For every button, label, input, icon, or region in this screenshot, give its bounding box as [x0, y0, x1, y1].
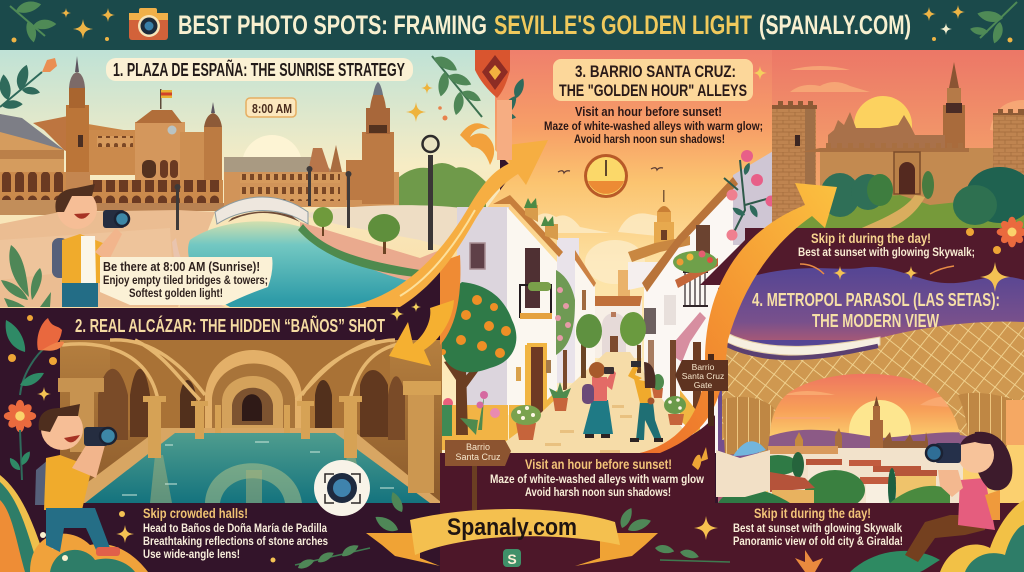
text block: sunset tips — [544, 104, 763, 146]
right tower — [362, 132, 394, 204]
illustration: far buildings and gate — [592, 270, 642, 358]
band: maroon upper — [700, 228, 1024, 285]
text block: lower sunset tips: Visit an hour before sunset! — [525, 456, 672, 472]
decoration: band stars — [833, 262, 1010, 292]
text block: skip by day bottom — [733, 505, 903, 548]
illustration: parasol columns — [722, 393, 1024, 455]
decoration: leaf sprig left — [0, 58, 57, 110]
text box: sunrise tips: Be there at 8:00 AM (Sunrise)! — [103, 259, 260, 274]
text block: lower sunset tips — [490, 456, 705, 499]
right wing — [224, 157, 335, 174]
decoration: band swirls — [800, 264, 954, 274]
text block: skip by day bottom: Best at sunset with glowing Skywalk — [733, 521, 902, 535]
illustration: side arches — [98, 369, 405, 440]
text block: sunset tips: Maze of white-washed alleys with warm glow; — [544, 119, 763, 133]
illustration: street trees — [555, 270, 706, 378]
illustration: clouds — [790, 66, 1024, 135]
person: woman with camera — [905, 432, 1012, 562]
band: purple heading — [718, 267, 1024, 345]
illustration: side walkways — [60, 428, 442, 503]
illustration: small trees — [313, 207, 400, 254]
arrow: Barrio to Metropol — [640, 183, 837, 453]
panel 4: Metropol Parasol band — [700, 217, 1024, 510]
heading: panel 4: THE MODERN VIEW — [812, 311, 939, 331]
illustration: reflecting pool — [85, 433, 430, 503]
text block: sunset tips: Avoid harsh noon sun shadows! — [574, 132, 725, 146]
text box: sunrise tips: Enjoy empty tiled bridges & towers; — [103, 273, 268, 287]
illustration: sun — [854, 96, 912, 154]
decoration: leaf accent — [692, 447, 708, 470]
text block: Baños tips: Skip crowded halls! — [143, 505, 248, 521]
banner: Spanaly.com — [366, 509, 658, 567]
illustration: castle walls — [772, 101, 1024, 243]
ribbon tails — [366, 533, 658, 566]
panel 3 lower: sunset text band — [440, 415, 715, 503]
panel 2: Real Alcázar — [0, 272, 442, 572]
text block: Baños tips: Head to Baños de Doña María de Padilla — [143, 521, 327, 535]
panel 4 top: Alcázar and cathedral at sunset — [772, 50, 1024, 250]
illustration: lamp posts — [174, 136, 438, 250]
decoration: left stars — [12, 8, 115, 42]
heading: panel 3 — [553, 59, 753, 101]
signpost: Barrio Santa Cruz Gate: Barrio — [692, 362, 715, 372]
illustration: glass dome — [716, 450, 770, 497]
illustration: vault ribs — [62, 340, 410, 400]
decoration: plant bottom left — [1, 245, 51, 307]
decoration: left floral column — [4, 315, 64, 480]
title: SEVILLE'S GOLDEN LIGHT — [494, 10, 752, 40]
person: photographer crouching — [35, 404, 120, 556]
illustration: city roofs — [718, 446, 963, 510]
person: tourist in teal skirt — [582, 362, 616, 438]
illustration: parasol lattice canopy — [722, 322, 1024, 445]
illustration: nested arches — [205, 350, 302, 430]
text block: skip by day top — [798, 230, 975, 259]
badge: 8:00 AM: 8:00 AM — [252, 101, 292, 116]
text block: Baños tips: Breathtaking reflections of stone arches — [143, 534, 328, 548]
illustration: sun — [242, 135, 302, 195]
illustration: flower pots — [511, 374, 686, 440]
text block: skip by day top: Skip it during the day! — [811, 230, 931, 246]
decoration: stars — [406, 82, 448, 122]
text block: Baños tips — [143, 505, 328, 561]
illustration: Parasol view — [716, 322, 1024, 510]
illustration: skywalk railing — [726, 333, 880, 355]
text box: sunrise tips: Softest golden light! — [129, 286, 223, 300]
signpost: Barrio Santa Cruz: Santa Cruz — [455, 452, 501, 462]
central block — [89, 130, 139, 175]
text box: sunrise tips — [100, 257, 272, 305]
text block: lower sunset tips: Maze of white-washed alleys with warm glow — [490, 472, 705, 486]
illustration: orange tree — [440, 282, 516, 435]
illustration: lower plants — [442, 391, 500, 436]
text block: skip by day bottom: Panoramic view of old city & Giralda! — [733, 534, 903, 548]
heading: panel 1 — [106, 58, 413, 81]
icon: S logo: S — [507, 551, 517, 567]
illustration: palace — [0, 56, 399, 215]
arrow: orange tongue — [440, 255, 460, 345]
title — [178, 10, 911, 40]
header bar — [0, 0, 1024, 50]
panel 3: Barrio Santa Cruz — [440, 50, 776, 453]
illustration: Giralda tower — [943, 62, 965, 165]
left tower — [66, 105, 89, 175]
illustration: vaulted bath — [58, 340, 442, 503]
heading: panel 3: THE "GOLDEN HOUR" ALLEYS — [559, 81, 747, 100]
decoration: heading band stars — [390, 302, 421, 321]
decoration: right branch — [969, 2, 1017, 45]
heading: panel 2: 2. REAL ALCÁZAR: THE HIDDEN “BAÑOS” SHOT — [75, 315, 385, 336]
illustration: cathedral — [828, 112, 945, 165]
decoration: star and dots — [116, 511, 276, 562]
illustration: clouds — [530, 213, 668, 284]
signpost: Barrio Santa Cruz: Barrio — [466, 442, 490, 452]
illustration: trees behind plaza — [398, 163, 486, 215]
badge: 8:00 AM — [246, 98, 296, 117]
person: tourist in yellow top — [628, 361, 663, 442]
illustration: street — [490, 352, 700, 453]
decoration: birds — [558, 168, 663, 173]
illustration: clouds in sky — [775, 391, 950, 419]
illustration: plaza ground — [0, 210, 215, 307]
illustration: pink flower branch — [724, 150, 776, 240]
icon: camera — [129, 8, 168, 40]
decoration: bottom right foliage — [795, 500, 1024, 572]
decoration: ornate tile motif — [460, 50, 512, 165]
decoration: right stars — [922, 5, 1012, 42]
signpost: Barrio Santa Cruz — [445, 440, 511, 510]
text block: Baños tips: Use wide-angle lens! — [143, 547, 240, 561]
arcade — [0, 172, 70, 202]
illustration: canal — [188, 221, 412, 307]
person: photographer with camera — [52, 184, 129, 307]
illustration: gardens — [772, 167, 1024, 240]
decoration: banner foliage — [295, 490, 730, 571]
text block: lower sunset tips: Avoid harsh noon sun shadows! — [525, 485, 671, 499]
icon: camera lens badge — [314, 460, 370, 516]
arrow: Plaza to Barrio — [345, 140, 548, 307]
signpost: Barrio Santa Cruz Gate: Santa Cruz — [682, 371, 724, 381]
illustration: bridge — [215, 197, 308, 224]
decoration: large golden arrows — [345, 140, 837, 453]
text block: skip by day bottom: Skip it during the day! — [754, 505, 871, 521]
decoration: left branch — [10, 0, 57, 43]
decoration: star — [753, 66, 767, 80]
decoration: bottom left foliage — [0, 475, 148, 572]
panel 1: Plaza de España — [0, 50, 500, 308]
illustration: sun — [849, 400, 911, 462]
illustration: left house — [442, 195, 563, 450]
illustration: Giralda skyline — [795, 396, 928, 458]
signpost: Barrio Santa Cruz Gate: Gate — [694, 380, 712, 390]
decoration: foreground plant bottom right — [965, 525, 1024, 572]
icon: golden hour clock — [584, 154, 628, 198]
roof and left wing — [0, 114, 64, 212]
icon: S logo — [503, 549, 521, 567]
heading: panel 3: 3. BARRIO SANTA CRUZ: — [575, 62, 736, 81]
illustration: right house — [628, 150, 775, 453]
title: BEST PHOTO SPOTS: FRAMING — [178, 10, 487, 40]
panel 4 lower: caption band — [440, 503, 1024, 572]
heading: panel 4 — [752, 290, 1000, 331]
illustration: columns — [58, 378, 441, 493]
decoration: leaf sprig right — [432, 53, 483, 117]
signpost: Barrio Santa Cruz Gate — [675, 354, 728, 426]
illustration: distant hills — [760, 430, 1000, 462]
arrow: Alcázar to Barrio — [389, 300, 454, 366]
right tower — [204, 127, 222, 182]
heading: panel 1: 1. PLAZA DE ESPAÑA: THE SUNRISE STRATEGY — [113, 59, 405, 80]
illustration: mid-left houses — [557, 238, 596, 390]
decoration: sprig — [498, 77, 526, 121]
banner: Spanaly.com: Spanaly.com — [447, 514, 577, 541]
illustration: church tower — [654, 190, 674, 246]
title: (SPANALY.COM) — [759, 10, 911, 40]
text block: skip by day top: Best at sunset with glowing Skywalk; — [798, 245, 975, 259]
text block: sunset tips: Visit an hour before sunset! — [575, 104, 722, 119]
opening sky — [760, 368, 1024, 503]
decoration: orange flowers — [966, 217, 1024, 254]
